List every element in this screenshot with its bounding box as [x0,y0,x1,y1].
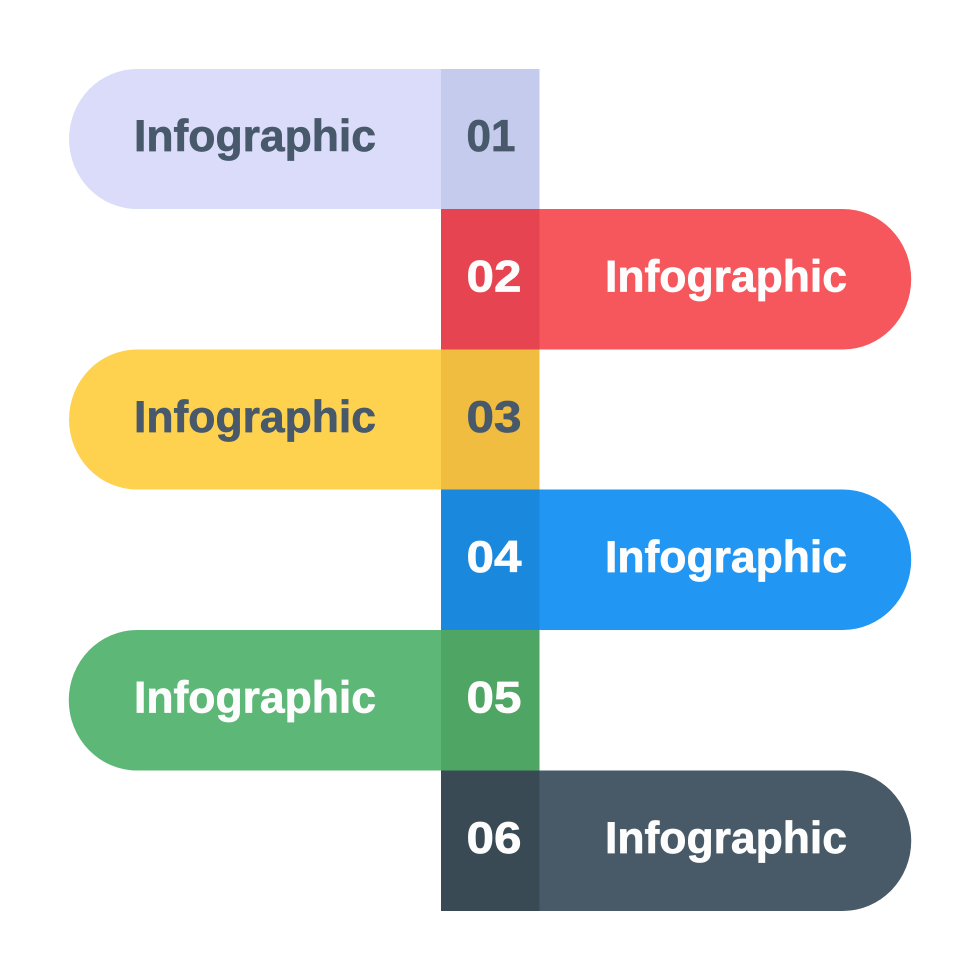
panel: row 06: Infographic [605,814,847,863]
panel: row 03 [69,350,540,490]
panel: row 02: 02 [466,252,522,302]
panel: row 03: Infographic [134,393,376,442]
panel: row 04 [441,490,911,630]
panel: row 03: 03 [466,393,522,442]
panel: row 05: 05 [466,674,522,722]
panel: row 06: 06 [466,814,522,863]
panel: row 06 [441,770,911,911]
panel: row 01: Infographic [134,112,376,161]
panel: row 04: Infographic [605,533,847,582]
panel: row 02: Infographic [605,252,847,302]
panel: row 01 [69,69,540,209]
panel: row 05: Infographic [134,674,376,722]
panel: row 04: 04 [466,533,522,582]
panel: row 02 [441,209,911,350]
panel: row 01: 01 [466,112,516,161]
panel: row 05 [69,630,539,770]
